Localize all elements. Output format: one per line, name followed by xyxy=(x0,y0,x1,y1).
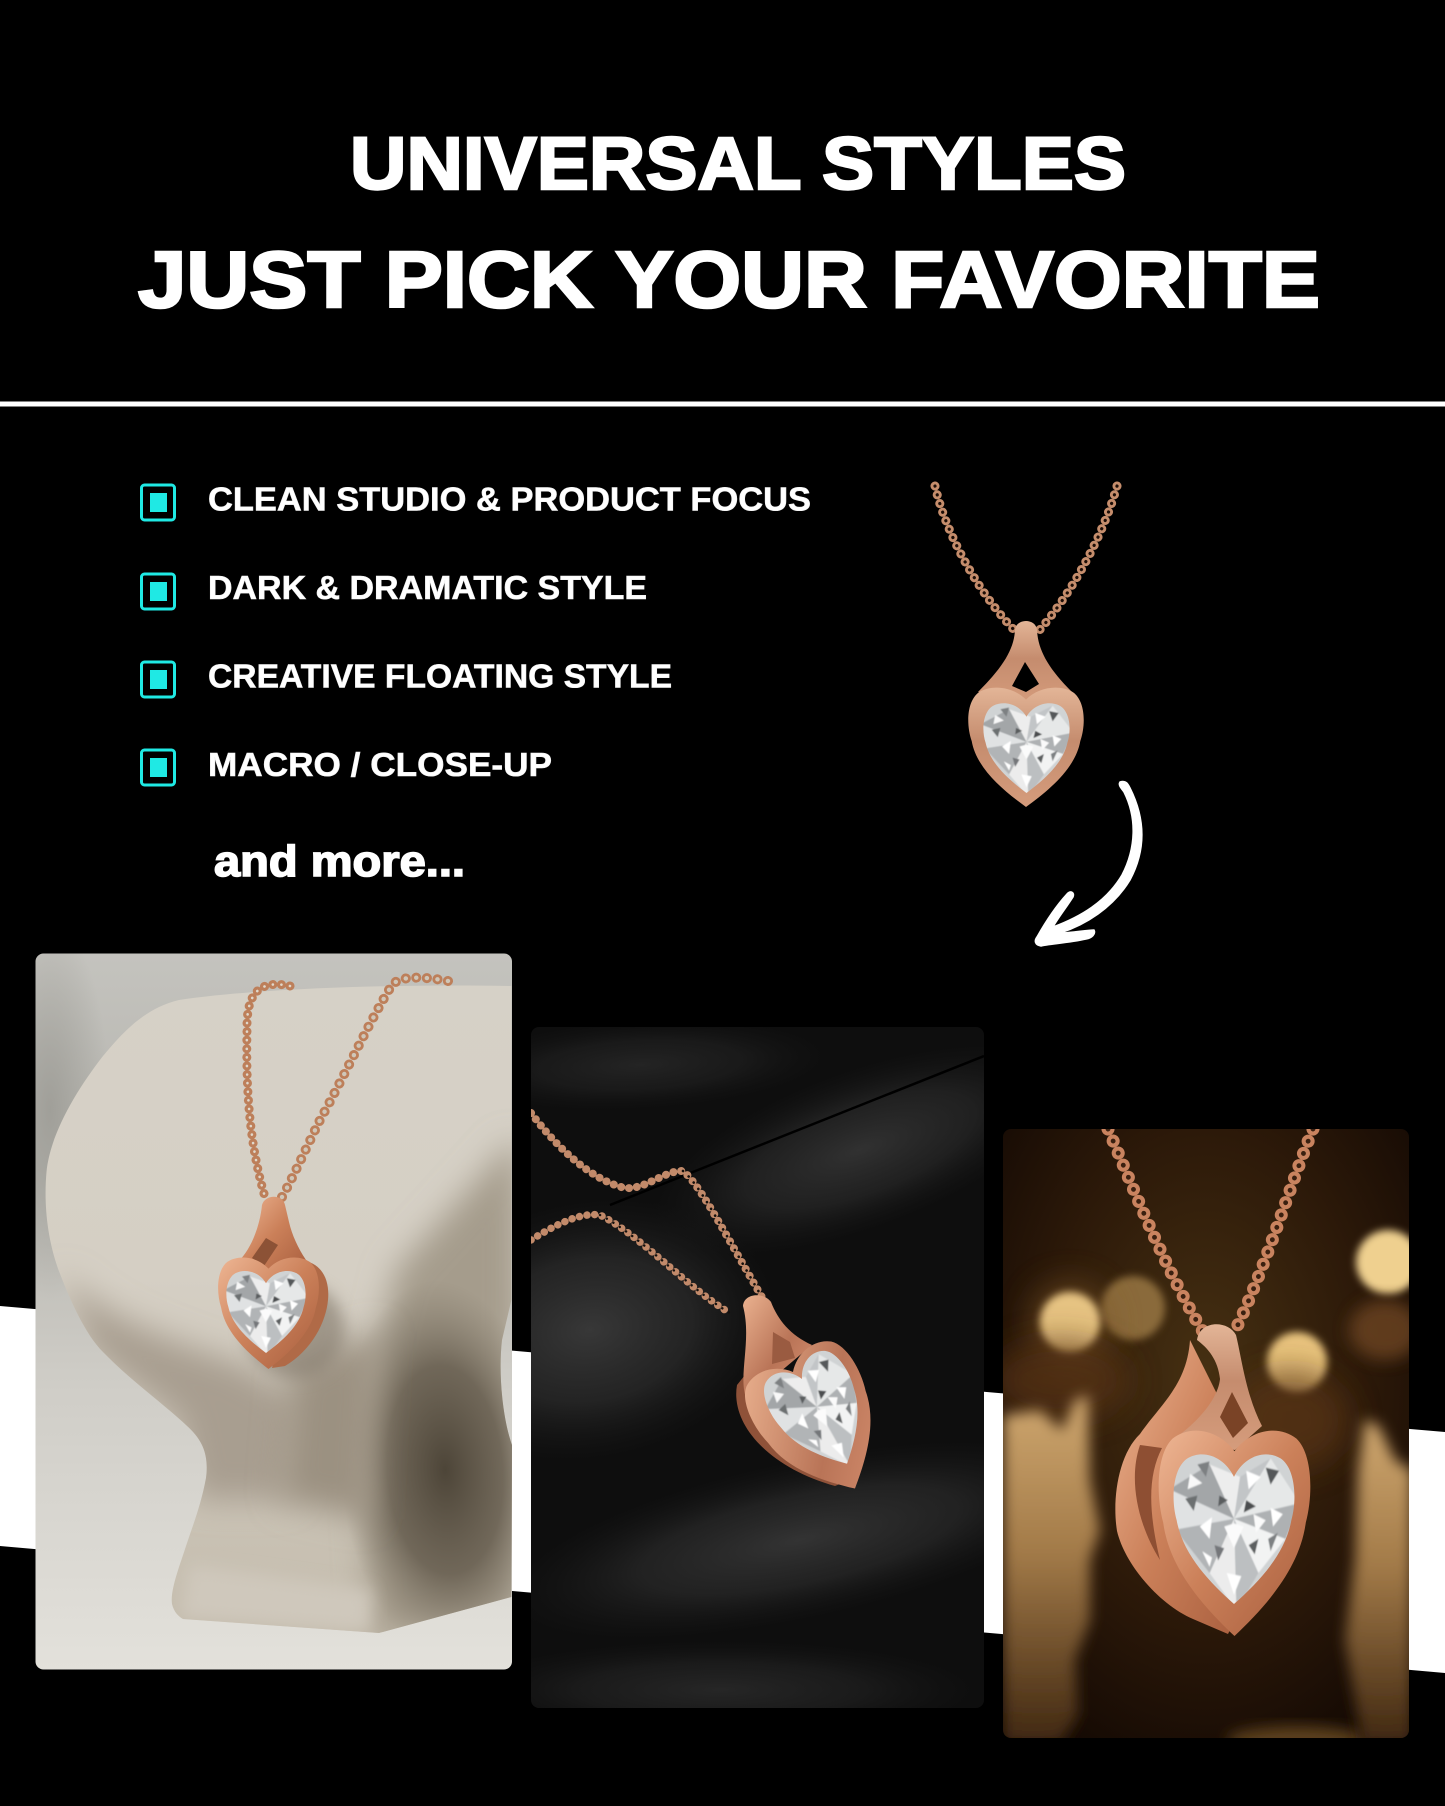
chain xyxy=(935,486,1117,633)
diamond xyxy=(979,695,1074,798)
pendant frame xyxy=(1159,1431,1310,1636)
chain xyxy=(531,1113,763,1313)
diamond xyxy=(764,1350,858,1464)
pendant bail xyxy=(242,1196,306,1268)
sculpture bust xyxy=(46,986,512,1633)
list item: dark and dramatic: DARK & DRAMATIC STYLE xyxy=(208,569,647,606)
white diagonal band behind photos xyxy=(0,1306,1445,1673)
candles xyxy=(1003,1395,1412,1745)
satin folds xyxy=(531,1036,984,1708)
list item: macro close-up: MACRO / CLOSE-UP xyxy=(208,746,552,783)
style list xyxy=(142,480,811,886)
pendant shadow xyxy=(245,1282,345,1378)
chain xyxy=(1108,1129,1313,1335)
list item: creative floating: CREATIVE FLOATING STYLE xyxy=(208,658,672,694)
title xyxy=(138,122,1320,324)
chain xyxy=(247,978,448,1209)
pendant frame xyxy=(968,688,1084,807)
curved arrow xyxy=(1035,781,1142,946)
diamond xyxy=(226,1271,306,1353)
pendant back edge xyxy=(272,1260,328,1368)
studio backdrop xyxy=(35,953,513,1670)
and more text: and more... xyxy=(214,837,465,886)
bail xyxy=(978,621,1072,705)
pendant back xyxy=(1115,1340,1230,1634)
product necklace xyxy=(935,486,1117,807)
divider line xyxy=(0,402,1445,406)
satin backdrop xyxy=(531,1027,984,1708)
title: UNIVERSAL STYLES xyxy=(350,122,1126,205)
list item: clean studio: CLEAN STUDIO & PRODUCT FOCUS xyxy=(208,480,811,518)
diamond xyxy=(1174,1454,1294,1604)
photo: candlelight xyxy=(990,1129,1421,1754)
photo: dark satin xyxy=(531,1027,984,1708)
bokeh lights xyxy=(990,1230,1421,1754)
pendant bail xyxy=(743,1295,812,1398)
pendant bail xyxy=(1182,1324,1262,1450)
title: JUST PICK YOUR FAVORITE xyxy=(138,235,1320,324)
pendant frame xyxy=(218,1257,319,1369)
warm backdrop xyxy=(1003,1129,1409,1738)
pendant frame xyxy=(745,1341,870,1488)
pendant back xyxy=(736,1377,839,1486)
photo: clean studio xyxy=(36,954,512,1670)
